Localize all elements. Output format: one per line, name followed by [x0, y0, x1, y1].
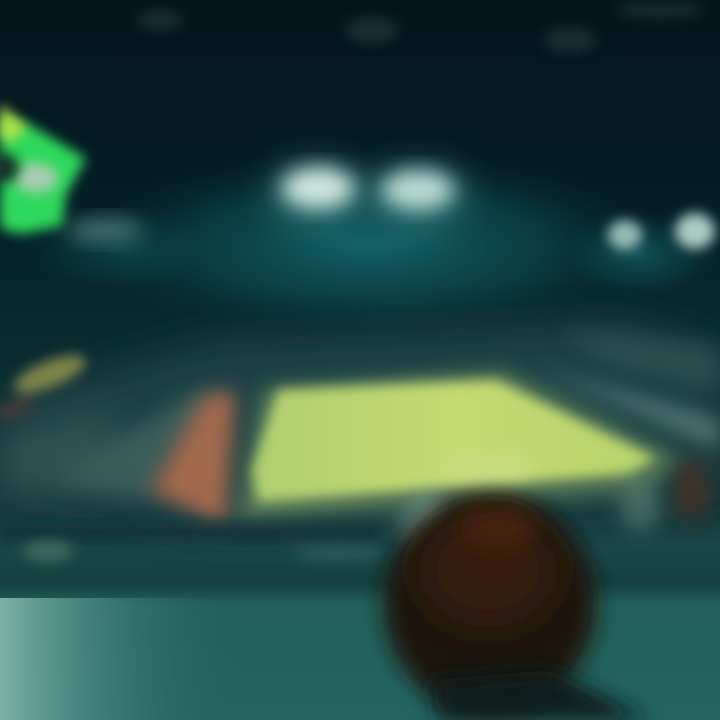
spectator head [384, 497, 650, 720]
foreground floor light [0, 598, 240, 720]
lower stand rail [0, 522, 386, 562]
stands [0, 320, 720, 535]
green sign [0, 104, 143, 242]
floodlights [272, 164, 715, 250]
spectator hand [393, 458, 660, 556]
playing field [236, 370, 684, 522]
arena glow [20, 150, 720, 340]
yellow stand patch [0, 348, 90, 424]
running track [150, 390, 236, 526]
right spectator [674, 460, 710, 520]
ceiling fixtures [138, 3, 704, 52]
